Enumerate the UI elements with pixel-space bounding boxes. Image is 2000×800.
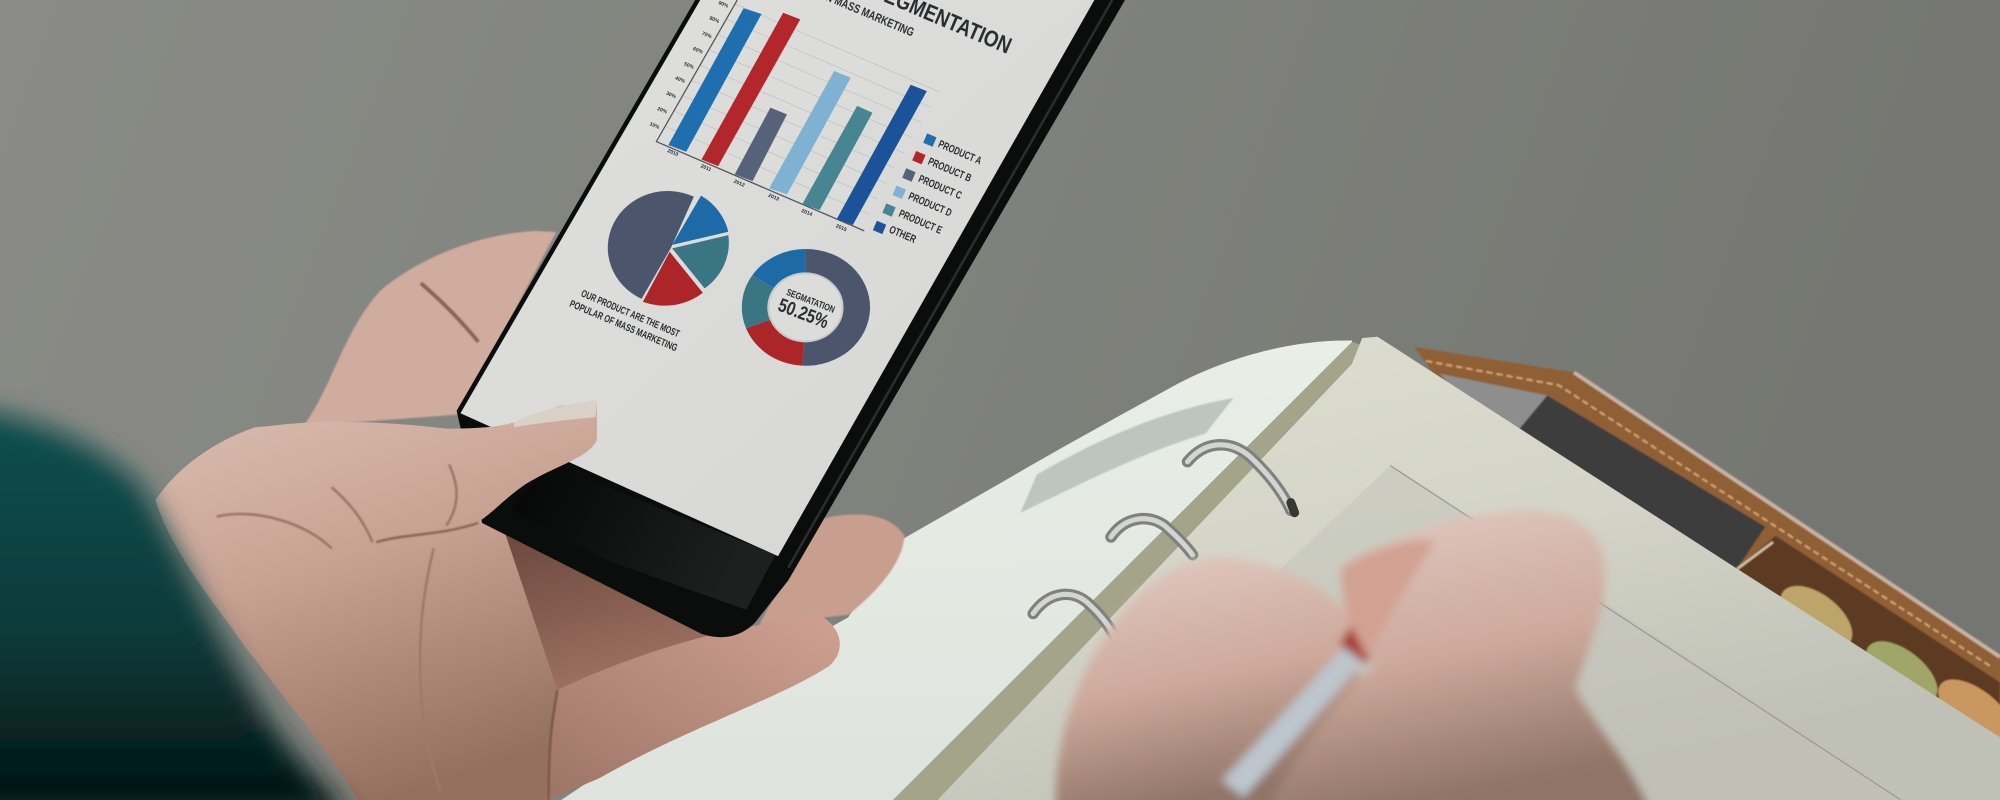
bar: product E [802, 106, 872, 210]
shadow stripe on page [1020, 398, 1233, 513]
axis tick labels: 70% [701, 31, 713, 40]
thumb creases [217, 464, 478, 548]
axis tick labels: 2011 [699, 163, 712, 173]
coloured index tabs [1769, 573, 2000, 756]
right plastic divider [938, 337, 2000, 800]
thumb [156, 401, 597, 638]
writing hand [1056, 511, 1652, 800]
binder rings [1033, 445, 1295, 639]
pie chart caption: OUR PRODUCT ARE THE MOST [579, 289, 681, 340]
ring finger behind phone [759, 514, 904, 625]
finger crease [421, 283, 478, 342]
axis tick labels: 30% [665, 91, 677, 100]
screen content [568, 0, 1016, 366]
chart axes [656, 0, 864, 231]
axis tick labels: 40% [674, 75, 686, 85]
legend item: other: OTHER [887, 224, 918, 246]
legend item: product A: PRODUCT A [936, 138, 983, 167]
bar: product C [735, 108, 787, 181]
donut chart [742, 249, 870, 366]
legend item: product E: PRODUCT E [897, 208, 944, 237]
axis tick labels: 90% [717, 0, 729, 10]
pie chart caption: POPULAR OF MASS MARKETING [568, 299, 679, 354]
axis tick labels: 2012 [733, 179, 746, 189]
thumbnail [514, 401, 597, 427]
legend item: product B: PRODUCT B [926, 156, 973, 185]
binder ring 3 [1033, 594, 1116, 639]
donut label: SEGMATATION [785, 287, 836, 316]
bar: product A [668, 8, 761, 152]
binder ring 2 [1111, 519, 1193, 555]
phone edge sheen [788, 0, 1112, 568]
index finger behind phone [304, 231, 556, 426]
leather cover [1415, 347, 2000, 778]
binder ring 1 [1188, 445, 1295, 513]
left white page [561, 341, 1352, 800]
rear finger [1056, 557, 1371, 800]
bar: product D [769, 71, 851, 194]
axis tick labels: 2010 [666, 148, 679, 158]
phone screen [460, 0, 1094, 556]
axis tick labels: 2014 [800, 208, 813, 218]
axis tick labels: 10% [648, 121, 661, 131]
notebook [561, 337, 2000, 800]
axis tick labels: 50% [683, 61, 695, 71]
palm and lower finger [156, 421, 840, 800]
shaded palm under phone [504, 529, 712, 690]
bar chart [648, 0, 939, 233]
axis tick labels: 80% [708, 15, 721, 25]
donut percentage: 50.25% [775, 295, 831, 333]
axis tick labels: 20% [656, 106, 668, 116]
legend item: product D: PRODUCT D [906, 190, 954, 219]
axis tick labels: 2015 [835, 223, 848, 233]
green sleeve [0, 406, 351, 800]
pie chart caption [568, 289, 681, 354]
lower finger [548, 614, 840, 800]
bar: other [837, 85, 927, 225]
lower bezel glass [510, 464, 776, 610]
front finger and thumb [1263, 511, 1652, 800]
phone [457, 0, 1125, 637]
pen [1222, 625, 1384, 797]
spine [893, 342, 1367, 800]
axis tick labels [648, 0, 848, 233]
axis tick labels: 2013 [767, 193, 780, 203]
bar: product B [702, 13, 800, 166]
legend [873, 133, 983, 246]
legend item: product C: PRODUCT C [916, 173, 963, 202]
phone body [457, 0, 1125, 637]
pie chart [608, 191, 729, 306]
axis tick labels: 60% [692, 46, 704, 56]
